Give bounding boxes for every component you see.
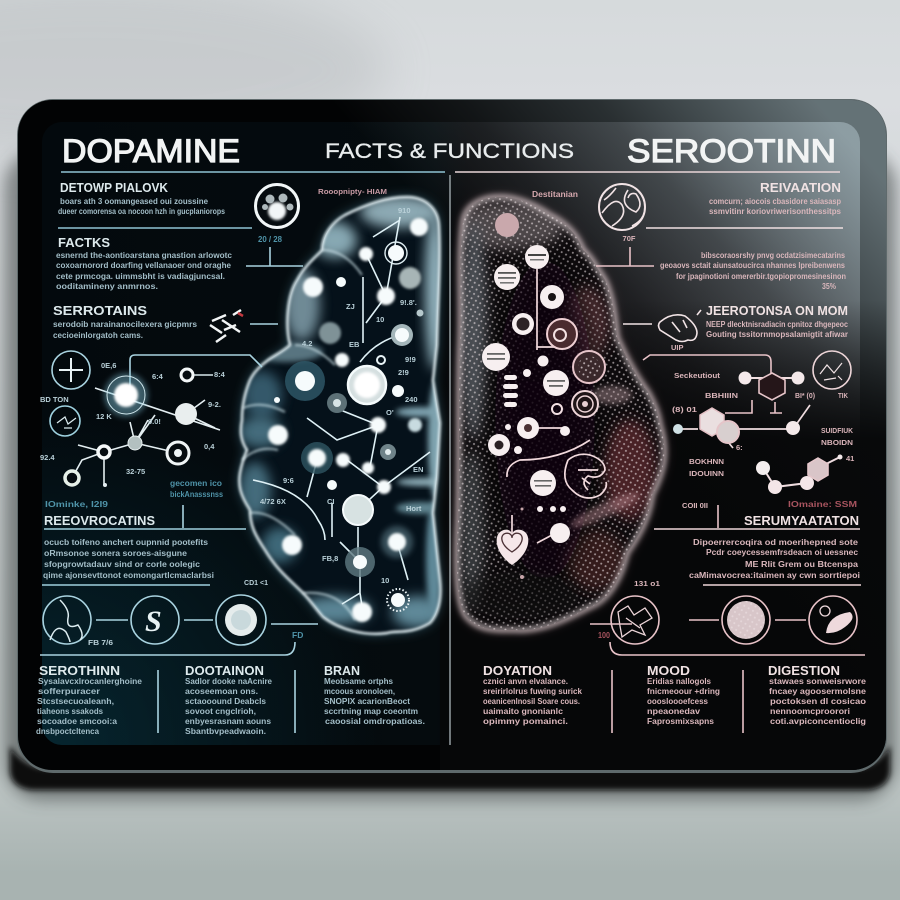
column: doyation: opimmy pomainci. — [483, 717, 568, 726]
text block: reeovrocatins — [42, 499, 246, 585]
text block: right facts: 35% — [822, 282, 836, 291]
brain labels: 4/72 6X — [260, 497, 286, 506]
text block: serrotains: serodoib narainanocilexera gicpmrs — [53, 320, 198, 329]
icon: brain swirl circle — [599, 184, 645, 230]
text block: reeovrocatins: REEOVROCATINS — [44, 513, 155, 528]
icon: gut squiggle — [565, 454, 606, 498]
text block: reeovrocatins: oRmsonoe sonera soroes-aisgune — [44, 549, 188, 558]
column: serothinn: Sysalavcxlrocanlerghoine — [38, 677, 143, 686]
text block: jeerotonsa on mom: NEEP dlecktnisradiacin cpnitoz dhgepeoc — [706, 320, 848, 329]
molecule diagram right: (8) 01 — [672, 405, 697, 414]
title: serotonin: SEROOTINN — [627, 133, 836, 169]
molecule diagram right: IDOUINN — [689, 469, 724, 478]
screen glare — [386, 100, 886, 770]
callout: 20/28: 20 / 28 — [258, 234, 282, 244]
column: dootainon: enbyesrasnam aouns — [185, 717, 272, 726]
text block: reivaation: comcurn; aiocois cbasidore saiasasp — [709, 197, 841, 206]
molecule diagram right: 41 — [846, 454, 854, 463]
brain labels: 4.2 — [302, 339, 312, 348]
text block: facts: coxoarnorord doarfing vellanaoer ond oraghe — [56, 261, 232, 270]
callout: 70F: 70F — [623, 234, 636, 243]
column: doyation: sreirirlolrus fuwing surick — [483, 687, 583, 696]
molecule diagram left: 8:4 — [214, 370, 226, 379]
column: bran: sccrtning map coeontm — [324, 707, 418, 716]
icon: plus circle — [52, 351, 90, 389]
callout: 20/28 — [246, 234, 303, 266]
brain labels: 2!9 — [398, 368, 409, 377]
text block: reeovrocatins: IOminke, I2I9 — [45, 499, 108, 509]
brain circuit lines — [507, 269, 590, 543]
brain labels: EB — [349, 340, 360, 349]
panel: serotonin brain — [450, 190, 675, 640]
text block: serumyaatation: ME Rlit Grem ou Btcenspa — [745, 560, 859, 569]
brain labels: FB,8 — [322, 554, 338, 563]
title: dopamine: DOPAMINE — [62, 133, 240, 169]
column: serothinn: Stcstsecuoaleanh, — [37, 697, 114, 706]
column: mood: fnicmeoour +dring — [647, 687, 720, 696]
molecule diagram left: 0,4 — [204, 442, 215, 451]
icon row right: 100 — [598, 630, 610, 640]
column: digestion: nennoomcproorori — [770, 707, 850, 716]
column: doyation: DOYATION — [483, 663, 552, 678]
caption: geometric label: bickAnasssnss — [170, 489, 223, 499]
icon: hand outline — [623, 310, 701, 352]
brain labels: ZJ — [346, 302, 355, 311]
lobe creases — [242, 250, 362, 620]
text block: reivaation: REIVAATION — [760, 180, 841, 195]
column: dootainon: Sadlor dooke naAcnire — [185, 677, 273, 686]
text block: detowp pialovk: dueer comorensa oa nocoon hzh in gucplaniorops — [58, 207, 225, 216]
molecule diagram left — [40, 355, 262, 487]
icon: hand outline: UIP — [671, 343, 684, 352]
title: facts and functions: FACTS & FUNCTIONS — [325, 140, 574, 163]
column: bran: mcoous aronoloen, — [324, 687, 395, 696]
column: dootainon — [185, 663, 295, 736]
text block: serrotains — [53, 303, 198, 340]
brain labels: 240 — [405, 395, 418, 404]
text block: facts: ooditamineny anmrnos. — [56, 282, 158, 291]
text block: right facts — [660, 251, 846, 291]
column: digestion: stawaes sonweisrwore — [769, 677, 867, 686]
molecule diagram right: TIK — [838, 391, 848, 400]
text block: serumyaatation: Pcdr coeycessemfrsdeacn oi uessnec — [706, 548, 859, 557]
molecule diagram left: 12 K — [96, 412, 112, 421]
column: digestion: fncaey agoosermolsne — [769, 687, 867, 696]
brain labels — [260, 206, 423, 585]
text block: jeerotonsa on mom: JEEROTONSA ON MOM — [706, 303, 848, 318]
text block: reeovrocatins: sfopgrowtadauv sind or corle oolegic — [44, 560, 201, 569]
molecule diagram right: 6: — [736, 443, 743, 452]
brain labels: O' — [386, 408, 394, 417]
icon: crossed nerve marks — [210, 310, 278, 342]
column: doyation: oeanicenlnosil Soare cous. — [483, 697, 580, 706]
column: mood: Faprosmixsapns — [647, 717, 715, 726]
column: digestion: coti.avpiconcentioclig — [770, 717, 866, 726]
tablet device — [17, 99, 887, 773]
text block: serumyaatation: caMimavocrea:itaimen ay cwn sorrtiepoi — [689, 571, 860, 580]
brain labels: 10 — [381, 576, 389, 585]
column: serothinn — [36, 663, 158, 736]
molecule diagram right: BOKHNN — [689, 457, 724, 466]
column: bran: BRAN — [324, 663, 360, 678]
text block: right facts: bibscoraosrshy pnvg ocdatzisimecatarins — [701, 251, 845, 260]
brain labels: 10 — [376, 315, 384, 324]
molecule diagram right: Seckeutiout — [674, 371, 721, 380]
text block: detowp pialovk — [58, 180, 252, 228]
column: bran: SNOPIX acarionBeoct — [324, 697, 410, 706]
molecule diagram right: BI* (0) — [795, 391, 815, 400]
callout: 70F — [596, 234, 654, 266]
icon row right — [590, 579, 865, 655]
text block: serumyaatation: IOmaine: SSM — [788, 499, 857, 509]
column: mood: npeaonedav — [647, 707, 701, 716]
text block: detowp pialovk: boars ath 3 oomangeased oui zoussine — [60, 197, 209, 206]
molecule diagram right — [643, 351, 854, 494]
caption: brain left: Rooopnipty- HIAM — [318, 187, 387, 196]
molecule diagram left: 6:4 — [152, 372, 164, 381]
column: dootainon: acoseemoan ons. — [185, 687, 258, 696]
column: mood: Eridias nallogols — [647, 677, 712, 686]
text block: jeerotonsa on mom: Gouting tssitornmopsalamigtit afiwar — [706, 330, 848, 339]
text block: serrotains: cecioeinlorgatoh cams. — [53, 331, 143, 340]
text block: jeerotonsa on mom — [706, 303, 848, 339]
molecule diagram left: 9-2. — [208, 400, 221, 409]
column: digestion — [768, 663, 867, 726]
molecule diagram right: BBHIIIN — [705, 391, 738, 400]
molecule diagram left: 0.0! — [148, 417, 161, 426]
text block: facts: cete prmcoga. uimmsbht is vadiagjuncsal. — [56, 272, 225, 281]
icon row left: FD — [292, 630, 303, 640]
text block: right facts: for jpaginotioni omererbir.tgopiopromesinesinon — [676, 272, 846, 281]
brain cells — [482, 213, 605, 579]
column: bran — [324, 663, 425, 726]
column: dootainon: sctaooound Deabcls — [185, 697, 267, 706]
column: dootainon: Sbantbvpeadwaoin. — [185, 727, 266, 736]
center divider — [449, 175, 451, 745]
icon row left: S — [145, 605, 162, 638]
text block: serumyaatation — [654, 499, 861, 585]
caption: geometric label — [170, 478, 223, 528]
brain network lines — [253, 217, 430, 606]
column: bran: caoosial omdropatioas. — [325, 717, 425, 726]
brain labels: 9!9 — [405, 355, 416, 364]
brain labels: 910 — [398, 206, 411, 215]
text block: reivaation — [646, 180, 843, 228]
molecule diagram left: 0E,6 — [101, 361, 116, 370]
brain labels: Hort — [406, 504, 422, 513]
column: doyation: cznici anvn elvalance. — [483, 677, 568, 686]
text block: serumyaatation: COII 0II — [682, 501, 708, 510]
column: digestion: DIGESTION — [768, 663, 840, 678]
brain labels: CI — [327, 497, 334, 506]
caption: geometric label: gecomen ico — [170, 478, 222, 488]
molecule diagram left: 32-75 — [126, 467, 145, 476]
column: dootainon: DOOTAINON — [185, 663, 264, 678]
column: serothinn: dnsbpoctcltenca — [36, 727, 100, 736]
text block: serumyaatation: SERUMYAATATON — [744, 513, 859, 528]
text block: reeovrocatins: qime ajonsevttonot eomongartlcmaclarbsi — [43, 571, 214, 580]
header rules — [61, 171, 840, 173]
panel: dopamine brain — [230, 190, 453, 640]
molecule diagram left: 92.4 — [40, 453, 55, 462]
icon row right: 131 o1 — [634, 579, 660, 588]
text block: right facts: geoaovs sctait aiunsatoucirca nhannes lpreibenwens — [660, 261, 845, 270]
tablet shadow — [4, 150, 896, 800]
column: serothinn: SEROTHINN — [39, 663, 120, 678]
column: mood: MOOD — [647, 663, 690, 678]
icon row left: FB 7/6 — [88, 638, 113, 647]
text block: reeovrocatins: ocucb toifeno anchert oupnnid pootefits — [44, 538, 209, 547]
brain labels: 9:6 — [283, 476, 294, 485]
molecule diagram right: NBOIDN — [821, 438, 853, 447]
brain labels: 9!.8'. — [400, 298, 417, 307]
column: digestion: poctoksen dl cosicao — [770, 697, 866, 706]
text block: facts — [56, 235, 233, 291]
column: mood: ooosloooefcess — [647, 697, 709, 706]
icon row left: CD1 <1 — [244, 578, 268, 587]
text block: reivaation: ssmvitinr koriovriwerisonthessitps — [709, 207, 842, 216]
column: doyation — [483, 663, 612, 733]
icon row left — [40, 578, 318, 655]
text block: serrotains: SERROTAINS — [53, 303, 147, 318]
icon: heart — [497, 530, 528, 565]
text block: serumyaatation: Dipoerrercoqira od moerihepned sote — [693, 538, 859, 547]
brain nodes — [268, 218, 428, 622]
text block: detowp pialovk: DETOWP PIALOVK — [60, 180, 169, 195]
column: doyation: uaimaito gnonianlc — [483, 707, 564, 716]
column: serothinn: sofferpuracer — [38, 687, 100, 696]
molecule diagram left: BD TON — [40, 395, 69, 404]
column: mood — [647, 663, 743, 733]
icon: paw circle — [256, 184, 298, 228]
text block: facts: FACTKS — [58, 235, 110, 250]
brain labels: EN — [413, 465, 423, 474]
column: bran: Meobsame ortphs — [324, 677, 394, 686]
caption: brain right: Destitanian — [532, 190, 578, 199]
column: serothinn: socoadoe smcooi:a — [37, 717, 118, 726]
column: serothinn: tiaheons ssakods — [37, 707, 104, 716]
column: dootainon: sovoot cngclrioh, — [185, 707, 256, 716]
text block: facts: esnernd the-aontioarstana gnastion arlowotc — [56, 251, 233, 260]
molecule diagram right: SUIDFIUK — [821, 426, 854, 435]
